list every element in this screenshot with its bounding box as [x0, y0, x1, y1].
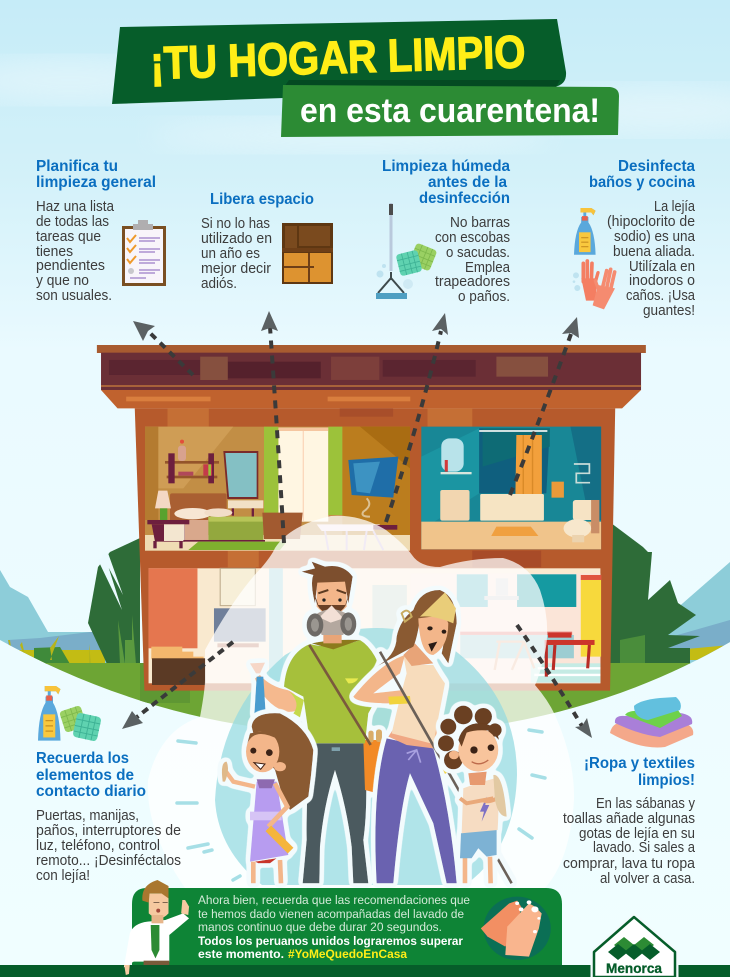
footer bar [0, 965, 730, 977]
heading: limpieza general [36, 174, 156, 191]
arrow: to planning [133, 321, 193, 375]
reminder text: te hemos dado vienen acompañadas del lavado de [198, 907, 464, 921]
body text [201, 215, 272, 292]
body text: inodoros o [629, 272, 695, 289]
body text: tienes [36, 243, 73, 260]
heading: Libera espacio [210, 191, 314, 208]
heading: Recuerda los [36, 750, 129, 767]
reminder text: #YoMeQuedoEnCasa [288, 947, 407, 961]
heading [584, 755, 695, 789]
dad [250, 562, 385, 883]
panel: clean clothes and textiles [563, 697, 696, 887]
arrow: bottom-left to contact items [122, 642, 233, 729]
body text: No barras [450, 214, 510, 231]
body text: Haz una lista [36, 198, 114, 215]
body text: La lejía [654, 198, 695, 215]
plant right [606, 520, 700, 664]
body text: tareas que [36, 228, 101, 245]
teal dome behind the family [215, 628, 517, 885]
body text [36, 198, 114, 304]
body text: comprar, lava tu ropa [563, 855, 696, 872]
body text [563, 795, 696, 887]
icon: clipboard [122, 220, 166, 286]
heading: antes de la [428, 174, 507, 191]
character: man pointing up [124, 880, 189, 975]
heading: Limpieza húmeda [382, 158, 510, 175]
body text: mejor decir [201, 260, 271, 277]
icon: washing hands [481, 897, 551, 960]
heading [36, 750, 146, 800]
Menorca logo [594, 917, 675, 977]
reminder text: este momento. [198, 947, 284, 961]
arrow: to free space [261, 311, 284, 543]
body text: utilizado en [201, 230, 272, 247]
house [97, 345, 646, 691]
arrow: to bathrooms and kitchen [510, 317, 579, 495]
heading [36, 158, 156, 191]
heading: contacto diario [36, 783, 146, 800]
body text: buena aliada. [613, 243, 695, 260]
house wall [135, 408, 615, 691]
bathroom [421, 427, 601, 549]
icon: spray bottle [574, 208, 596, 255]
body text: de todas las [36, 213, 109, 230]
green panel [132, 888, 562, 965]
bedroom [145, 427, 410, 551]
title strip shadow [284, 80, 560, 87]
icon: mop and sponges [376, 203, 437, 299]
panel: plan your cleaning [36, 158, 166, 304]
Menorca logo: Menorca [606, 961, 662, 976]
icon: folded towels [610, 697, 693, 747]
heading: baños y cocina [589, 174, 695, 191]
heading: elementos de [36, 767, 134, 784]
body text [36, 807, 181, 884]
body text: Si no lo has [201, 215, 270, 232]
heading: desinfección [419, 190, 510, 207]
heading [589, 158, 695, 191]
heading: ¡Ropa y textiles [584, 755, 695, 772]
body text: y que no [36, 272, 89, 289]
panel: free up space [201, 191, 333, 292]
icon: spray bottle and sponges [38, 686, 102, 742]
reminder text: Todos los peruanos unidos lograremos superar [198, 934, 463, 948]
body text: caños. ¡Usa [626, 287, 695, 304]
decorative dashes [177, 730, 545, 880]
girl [222, 713, 313, 883]
body text: un año es [201, 245, 260, 262]
body text: (hipoclorito de [607, 213, 695, 230]
mother [353, 590, 512, 883]
arrow: bottom-right to textiles [517, 625, 592, 738]
plant left [88, 538, 140, 664]
panel: wet cleaning before disinfection [376, 158, 510, 305]
body text: remoto... ¡Desinféctalos [36, 852, 181, 869]
light green subtitle strip [281, 85, 619, 137]
arrow: to wet cleaning [386, 313, 448, 522]
reminder text: Ahora bien, recuerda que las recomendaciones que [198, 893, 470, 907]
body text: son usuales. [36, 287, 112, 304]
dark green title strip [112, 19, 566, 104]
body text: En las sábanas y [596, 795, 695, 812]
body text: Emplea [465, 259, 510, 276]
body text: gotas de lejía en su [579, 825, 695, 842]
body text [607, 198, 695, 319]
body text: adiós. [201, 275, 237, 292]
body text: guantes! [643, 302, 695, 319]
heading: Desinfecta [618, 158, 695, 175]
body text: con escobas [435, 229, 510, 246]
subtitle: en esta cuarentena! [300, 92, 600, 130]
title banner [112, 19, 619, 137]
body text: luz, teléfono, control [36, 837, 160, 854]
body text [435, 214, 510, 305]
body text: al volver a casa. [600, 870, 695, 887]
body text: lavado. Si sales a [593, 839, 695, 856]
body text: toallas añade algunas [563, 810, 695, 827]
family [222, 562, 512, 883]
body text: Utilízala en [629, 258, 695, 275]
body text: Puertas, manijas, [36, 807, 139, 824]
reminder text [198, 893, 470, 961]
body text: paños, interruptores de [36, 822, 181, 839]
reminder text: manos continuo que debe durar 20 segundos. [198, 920, 442, 934]
body text: o sacudas. [446, 244, 510, 261]
landscape: hills and plants [0, 520, 730, 743]
body text: pendientes [36, 257, 105, 274]
body text: sodio) es una [614, 228, 695, 245]
body text: con lejía! [36, 867, 90, 884]
roof [97, 345, 646, 417]
panel: handwashing reminder [124, 880, 562, 975]
heading [382, 158, 510, 207]
body text: o paños. [458, 288, 510, 305]
boy [438, 706, 507, 883]
body text: trapeadores [435, 273, 510, 290]
lower floor rooms [149, 568, 601, 685]
icon: cabinet [282, 223, 333, 284]
panel: disinfect bathrooms and kitchen [573, 158, 695, 319]
panel: daily contact items [36, 686, 181, 884]
heading: Planifica tu [36, 158, 118, 175]
main title: ¡TU HOGAR LIMPIO [150, 25, 526, 89]
icon: rubber gloves [573, 261, 615, 309]
heading: limpios! [638, 772, 695, 789]
translucent haze behind the family [148, 516, 574, 888]
